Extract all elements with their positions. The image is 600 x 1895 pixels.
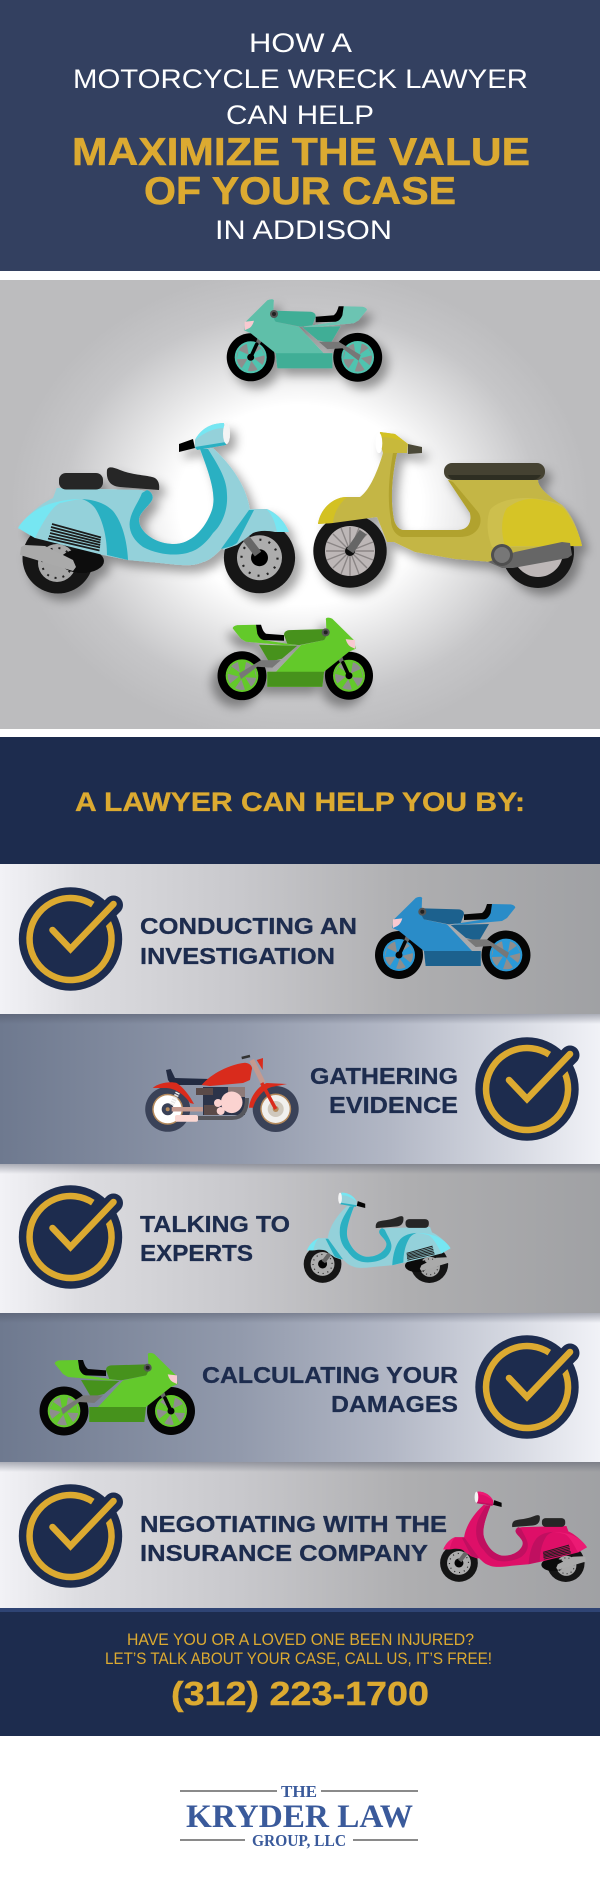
icon: check badge [19, 1484, 122, 1588]
text: talking to experts: EXPERTS [140, 1240, 253, 1266]
text: gathering evidence: GATHERING [310, 1063, 458, 1089]
text: negotiating with the insurance company [140, 1511, 447, 1566]
panel: gathering evidence [0, 1014, 600, 1164]
text: conducting an investigation: CONDUCTING AN [140, 913, 357, 939]
panel: talking to experts [0, 1164, 600, 1313]
logo: the kryder law group: GROUP, LLC [252, 1831, 346, 1850]
title: how a motorcycle wreck lawyer can help: MOTORCYCLE WRECK LAWYER [73, 64, 528, 94]
text: phone number: (312) 223-1700 [171, 1676, 429, 1713]
text: calculating your damages: CALCULATING YOUR [202, 1362, 458, 1388]
text: gathering evidence [310, 1063, 458, 1118]
logo: the kryder law group: KRYDER LAW [186, 1799, 413, 1835]
panel: negotiating with the insurance company [0, 1462, 600, 1608]
panel: conducting an investigation [0, 864, 600, 1014]
icon: red cafe motorcycle [145, 1056, 299, 1132]
text: conducting an investigation [140, 913, 357, 969]
title highlight: maximize the value of your case: OF YOUR CASE [144, 170, 456, 213]
panel: calculating your damages [0, 1313, 600, 1462]
logo: the kryder law group [180, 1782, 418, 1850]
text: negotiating with the insurance company: NEGOTIATING WITH THE [140, 1511, 447, 1537]
icon: blue scooter [18, 423, 295, 594]
title location: in addison: IN ADDISON [215, 215, 392, 245]
text: negotiating with the insurance company: INSURANCE COMPANY [140, 1540, 428, 1566]
section heading band [0, 737, 600, 864]
icon: check badge [475, 1335, 579, 1439]
header panel [0, 0, 600, 271]
icon: green sport motorcycle [40, 1353, 195, 1435]
icon: check badge [475, 1037, 579, 1141]
text: injured question: LET’S TALK ABOUT YOUR CASE, CALL US, IT’S FREE! [105, 1650, 492, 1668]
icon: teal sport motorcycle [227, 299, 382, 382]
icon: pink scooter [440, 1492, 587, 1582]
logo: the kryder law group: THE [281, 1782, 317, 1801]
text: calculating your damages: DAMAGES [331, 1391, 458, 1417]
icon: blue sport motorcycle [375, 897, 530, 979]
text: talking to experts: TALKING TO [140, 1211, 290, 1237]
heading: a lawyer can help you by: A LAWYER CAN HELP YOU BY: [75, 787, 525, 817]
title: how a motorcycle wreck lawyer can help: CAN HELP [226, 100, 374, 130]
text: injured question: HAVE YOU OR A LOVED ONE BEEN INJURED? [127, 1631, 474, 1649]
title: how a motorcycle wreck lawyer can help: HOW A [249, 28, 352, 58]
icon: light blue scooter [304, 1193, 451, 1283]
text: conducting an investigation: INVESTIGATION [140, 943, 335, 969]
title highlight: maximize the value of your case: MAXIMIZE THE VALUE [72, 131, 530, 174]
icon: yellow scooter [313, 432, 582, 588]
panel: call to action footer [0, 1608, 600, 1736]
panel: hero with four motorcycles [0, 280, 600, 729]
title highlight: maximize the value of your case [72, 131, 530, 213]
title: how a motorcycle wreck lawyer can help [73, 28, 528, 130]
icon: green sport motorcycle [218, 618, 373, 700]
icon: check badge [19, 1185, 122, 1289]
text: talking to experts [140, 1211, 290, 1266]
text: injured question [105, 1631, 492, 1668]
text: calculating your damages [202, 1362, 458, 1417]
icon: check badge [19, 887, 122, 991]
text: gathering evidence: EVIDENCE [329, 1092, 458, 1118]
